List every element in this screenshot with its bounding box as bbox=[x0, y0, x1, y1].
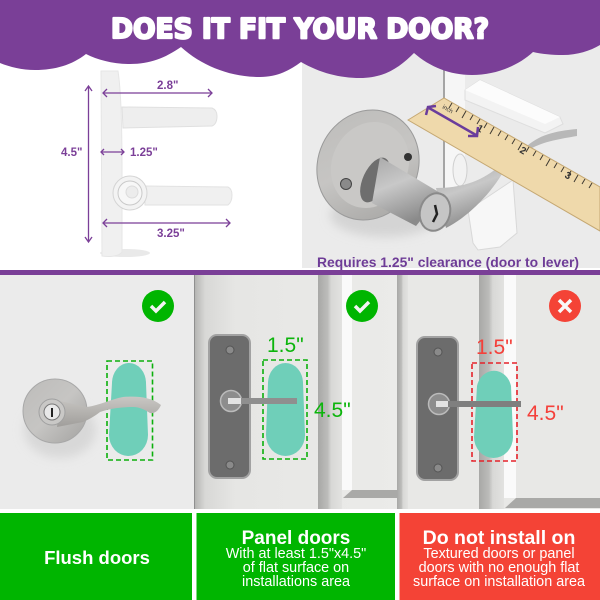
card: do not install: Do not install on bbox=[423, 527, 575, 549]
label: 4.5: 4.5" bbox=[61, 147, 82, 159]
icon: backplate and lever bbox=[209, 335, 307, 478]
card: panel doors: With at least 1.5"x4.5" bbox=[226, 546, 366, 562]
clearance caption: Requires 1.25" clearance (door to lever) bbox=[317, 255, 579, 270]
arrow: 4.5 inch height bbox=[85, 86, 92, 242]
card: panel doors: Panel doors bbox=[242, 528, 350, 549]
dashed red frame bbox=[472, 363, 517, 461]
card: panel doors bbox=[196, 513, 395, 600]
ruler: 2 bbox=[518, 145, 528, 158]
teal mounting area bbox=[109, 363, 148, 456]
arrow: 1.25 inch width bbox=[101, 149, 124, 155]
label: 1.25: 1.25" bbox=[130, 147, 158, 159]
icon: lock pivot bbox=[453, 154, 467, 186]
card: do not install bbox=[400, 513, 600, 600]
icon: green check bbox=[346, 290, 378, 322]
teal mounting area bbox=[474, 371, 513, 458]
ruler bbox=[408, 98, 600, 231]
icon: white lever lock upper arm bbox=[465, 80, 563, 133]
icon: door lever tail bbox=[525, 129, 577, 149]
card: do not install: Textured doors or panel bbox=[423, 546, 575, 562]
card: do not install: surface on installation area bbox=[413, 574, 585, 590]
ruler: 3 bbox=[562, 170, 573, 183]
card: panel doors: of flat surface on bbox=[243, 560, 349, 576]
label: 1.5 red: 1.5" bbox=[476, 336, 513, 359]
label: 1.5 green: 1.5" bbox=[267, 334, 304, 357]
icon: white lever lock side view bbox=[100, 71, 232, 257]
dashed green frame bbox=[263, 360, 307, 459]
card: flush doors: Flush doors bbox=[44, 547, 150, 568]
teal mounting area bbox=[266, 363, 305, 456]
arrow: 3.25 inch width bbox=[103, 219, 230, 227]
panel: flush door photo bbox=[0, 275, 196, 510]
card: panel doors: installations area bbox=[242, 574, 350, 590]
panel: clearance photo with ruler bbox=[299, 40, 600, 268]
divider bar bbox=[0, 270, 600, 275]
icon: green check bbox=[142, 290, 174, 322]
icon: red cross bbox=[549, 290, 581, 322]
label: 3.25: 3.25" bbox=[157, 228, 185, 240]
label: 4.5 red: 4.5" bbox=[527, 402, 564, 425]
icon: white lever lock lower arm bbox=[468, 180, 517, 250]
card: flush doors bbox=[0, 513, 192, 600]
white gap under photos bbox=[0, 509, 600, 514]
arrow: clearance on ruler bbox=[426, 106, 478, 136]
title: DOES IT FIT YOUR DOOR? bbox=[111, 12, 489, 45]
ruler: 1 bbox=[474, 123, 485, 136]
panel: product dimensions diagram bbox=[61, 71, 232, 257]
label: 4.5 green: 4.5" bbox=[314, 399, 351, 422]
door edge plate bbox=[443, 60, 465, 195]
card: do not install: doors with no enough flat bbox=[419, 560, 579, 576]
dashed green frame bbox=[107, 361, 152, 460]
panel: panel door photo with fit bbox=[195, 275, 398, 510]
arrow: 2.8 inch width bbox=[103, 89, 212, 97]
label: 2.8: 2.8" bbox=[157, 80, 178, 92]
header banner with scalloped edge bbox=[0, 0, 600, 78]
icon: door lever flush bbox=[23, 379, 161, 443]
panel: textured door photo not fit bbox=[397, 275, 600, 510]
icon: backplate and lever bbox=[417, 337, 521, 480]
ruler: inch bbox=[441, 105, 454, 115]
icon: door knob lever bbox=[299, 93, 502, 237]
